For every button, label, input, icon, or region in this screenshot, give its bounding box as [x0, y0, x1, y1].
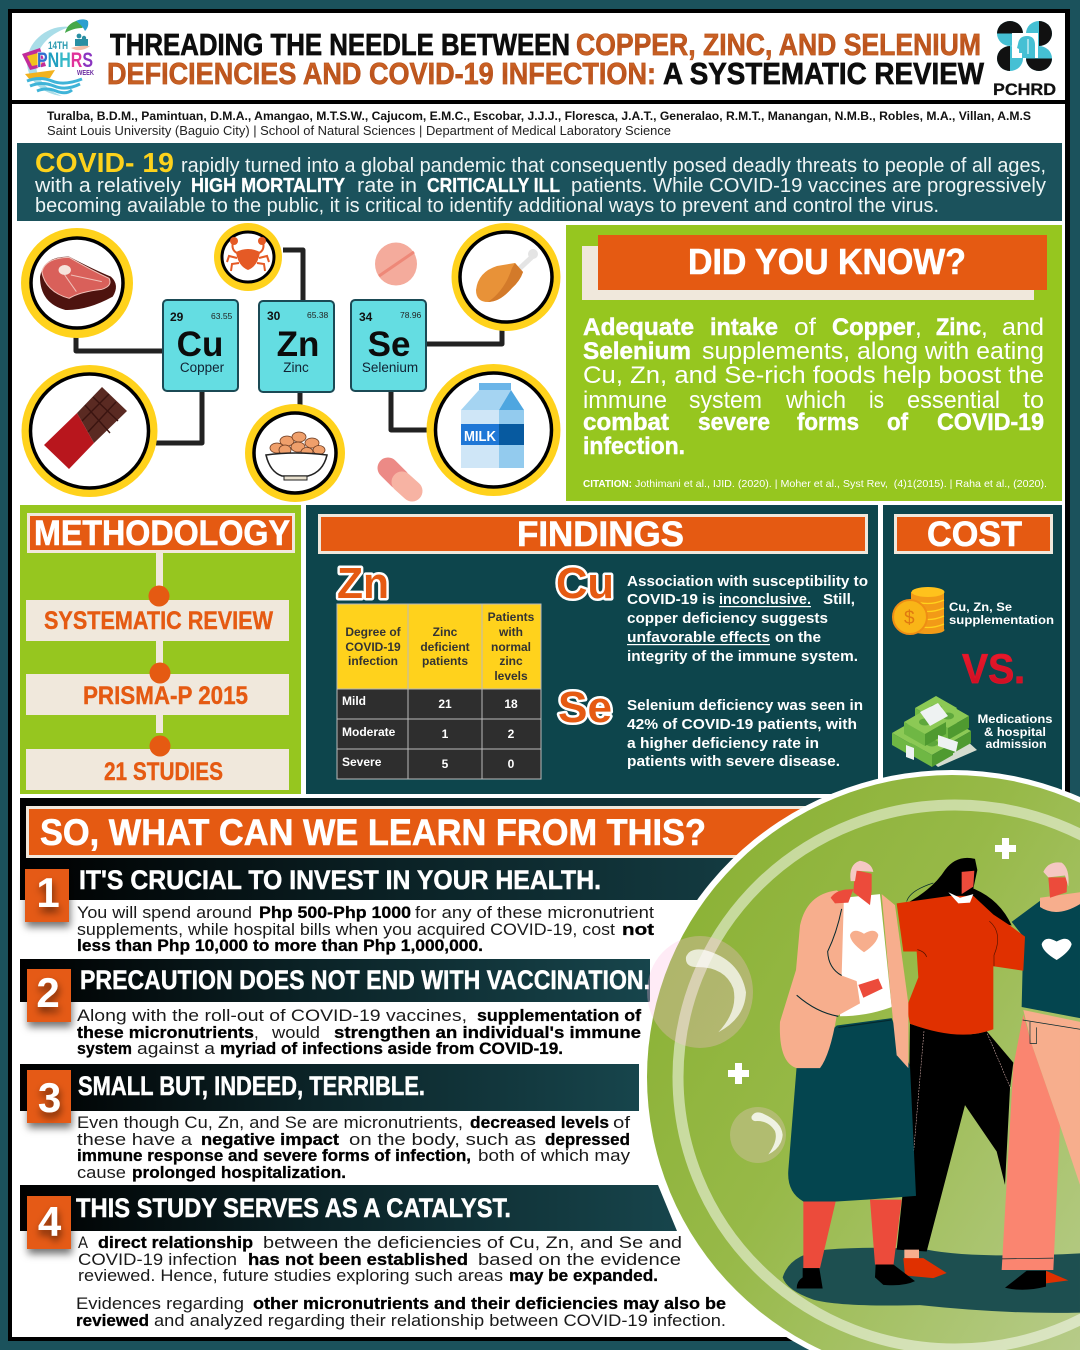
- step: 21 studies: 21 STUDIES: [104, 758, 223, 786]
- header rule: [12, 100, 1065, 104]
- card: copper: [163, 300, 238, 391]
- lesson 4: based on the evidence: [478, 1250, 681, 1269]
- card: copper: 29: [170, 310, 184, 324]
- lesson 1: You will spend around: [77, 903, 252, 922]
- card: selenium: Selenium: [362, 360, 418, 375]
- did you know body text: severe: [698, 409, 770, 436]
- lesson 4: has not been established: [248, 1250, 468, 1269]
- did you know body text: Zinc: [936, 314, 981, 341]
- logo: 14th PNHRS week: WEEK: [77, 68, 94, 77]
- heading: findings: [318, 514, 868, 554]
- selenium finding text: 42% of COVID-19 patients, with: [627, 716, 857, 733]
- step: systematic review: SYSTEMATIC REVIEW: [44, 607, 273, 635]
- citation: CITATION:: [583, 478, 632, 490]
- lesson 3: on the body, such as: [349, 1130, 536, 1149]
- lesson 3: negative impact: [201, 1130, 339, 1149]
- person: man in teal shirt: [1002, 862, 1080, 1290]
- authors and affiliation: Saint Louis University (Baguio City) | School of Natural Sciences | Department of Medical Laboratory Science: [47, 124, 671, 138]
- label: medications: Medications: [978, 712, 1053, 726]
- copper finding text: copper deficiency suggests: [627, 610, 828, 627]
- card: copper: Copper: [180, 360, 225, 375]
- lesson 3: both of which may: [478, 1146, 631, 1165]
- lesson 2: strengthen an individual's immune: [334, 1023, 641, 1042]
- lesson 2: myriad of infections aside from COVID-19.: [220, 1039, 563, 1058]
- card: selenium: [351, 300, 426, 391]
- closing paragraph: Evidences regarding: [76, 1294, 244, 1313]
- lesson 1: not: [622, 920, 654, 939]
- table: zinc levels: normal: [491, 640, 531, 654]
- authors and affiliation: Turalba, B.D.M., Pamintuan, D.M.A., Amangao, M.T.S.W., Cajucom, E.M.C., Escobar, J.J.J., Floresca, J.A.T., Generalao, R.M.T., Manangan, N.M.B., Robles, M.A., Villan, A.M.S: [47, 109, 1031, 123]
- heading: methodology: METHODOLOGY: [34, 514, 290, 553]
- lesson 4: A: [78, 1233, 89, 1252]
- card: copper: 63.55: [211, 311, 233, 321]
- panel: element cards and food sources: [21, 223, 560, 502]
- panel: COVID-19 intro: COVID- 19: [35, 147, 174, 178]
- lesson 4: between the deficiencies of Cu, Zn, and Se and: [263, 1233, 682, 1252]
- step: PRISMA-P 2015: [26, 674, 289, 715]
- lesson 4: 4: [38, 1198, 62, 1245]
- copper finding text: COVID-19 is: [627, 591, 715, 608]
- table: zinc levels: [337, 604, 541, 779]
- lesson 3: of: [613, 1113, 630, 1132]
- heading: did you know: [582, 235, 1047, 300]
- card: copper: Cu: [177, 325, 223, 364]
- copper finding text: unfavorable effects: [627, 629, 770, 646]
- label: medications: [978, 712, 1053, 751]
- people: [780, 858, 1080, 1313]
- bubble disc: [647, 775, 1080, 1350]
- panel: findings: [306, 505, 878, 794]
- did you know body text: ,: [981, 314, 988, 341]
- table: zinc levels: Moderate: [342, 725, 396, 739]
- illustration: friends inside bubble: [640, 770, 1080, 1350]
- closing paragraph: reviewed: [76, 1311, 149, 1330]
- panel: COVID-19 intro: rate in: [357, 175, 417, 197]
- copper finding text: inconclusive.: [719, 591, 811, 608]
- title: DEFICIENCIES AND COVID-19 INFECTION:: [107, 56, 656, 91]
- lesson 3: immune response and severe forms of infection,: [77, 1146, 471, 1165]
- table: zinc levels: Severe: [342, 755, 382, 769]
- panel: COVID-19 intro: rapidly turned into a global pandemic that consequently posed deadly threats to people of all ages,: [181, 155, 1046, 177]
- did you know body text: system: [689, 387, 762, 414]
- panel: COVID-19 intro: [17, 143, 1062, 221]
- lesson 3: prolonged hospitalization.: [132, 1163, 346, 1182]
- step markers: [148, 586, 170, 756]
- bubble white edge: [640, 770, 1080, 1350]
- card: selenium: 78.96: [400, 310, 422, 320]
- versus: VS.: [962, 645, 1025, 692]
- lesson 2: system: [77, 1039, 132, 1058]
- lesson 3: 3: [38, 1074, 61, 1121]
- panel: methodology: [20, 505, 301, 794]
- copper finding text: Association with susceptibility to: [627, 573, 868, 590]
- label: supplementation: [949, 600, 1054, 627]
- icon: nuts: [245, 404, 345, 502]
- did you know body text: Copper: [832, 314, 915, 341]
- icon: milk: MILK: [464, 428, 496, 445]
- person: man in jacket: [780, 861, 916, 1289]
- icon: money pile: [892, 696, 977, 767]
- table: zinc levels: Patients: [488, 610, 535, 624]
- did you know body text: of: [794, 314, 816, 341]
- lesson 1: IT'S CRUCIAL TO INVEST IN YOUR HEALTH.: [79, 865, 601, 895]
- selenium finding text: patients with severe disease.: [627, 753, 840, 770]
- lesson 4: may be expanded.: [509, 1266, 658, 1285]
- ground shadow: [783, 1248, 1080, 1313]
- did you know body text: forms: [797, 409, 859, 436]
- lesson 2: Along with the roll-out of COVID-19 vaccines,: [77, 1006, 467, 1025]
- icon: coins: $: [904, 608, 915, 629]
- card: selenium: Se: [368, 325, 410, 364]
- lesson 4: [20, 1185, 682, 1285]
- did you know body text: is: [869, 387, 884, 414]
- lesson 1: supplements, while hospital bills when you acquired COVID-19, cost: [77, 920, 615, 939]
- did you know body text: Adequate: [583, 314, 694, 341]
- person: woman upper body: [897, 871, 1025, 1035]
- closing paragraph: and analyzed regarding their relationship between COVID-19 infection.: [154, 1311, 726, 1330]
- logo: PCHRD: [993, 21, 1056, 99]
- lesson 3: depressed: [545, 1130, 630, 1149]
- table: zinc levels: 18: [504, 697, 518, 711]
- card: selenium: 34: [359, 310, 373, 324]
- methodology connector: [156, 553, 163, 733]
- icon: coins: [893, 587, 944, 634]
- step: 21 studies: [26, 749, 289, 790]
- did you know body text: ,: [915, 314, 922, 341]
- table: zinc levels: with: [498, 625, 523, 639]
- lesson 2: supplementation of: [477, 1006, 641, 1025]
- title: THREADING THE NEEDLE BETWEEN: [110, 27, 570, 62]
- copper symbol: Cu: [556, 559, 614, 608]
- copper finding text: integrity of the immune system.: [627, 648, 858, 665]
- icon: capsule: [388, 468, 412, 491]
- selenium finding text: a higher deficiency rate in: [627, 735, 819, 752]
- did you know body text: immune: [583, 387, 667, 414]
- zinc symbol: Zn: [337, 559, 389, 608]
- table: zinc levels: levels: [494, 669, 528, 683]
- table: zinc levels: COVID-19: [345, 640, 401, 654]
- lesson 1: [25, 865, 654, 955]
- did you know body text: infection.: [583, 433, 685, 460]
- table: zinc levels: 21: [438, 697, 452, 711]
- table: zinc levels: Zinc: [433, 625, 458, 639]
- lesson 1: 1: [36, 869, 60, 916]
- title: [107, 27, 985, 91]
- heading: cost: [894, 514, 1053, 554]
- card: zinc: Zinc: [283, 360, 309, 375]
- citation: Jothimani et al., IJID. (2020). | Moher et al., Syst Rev, (4)1(2015). | Raha et al., (2020).: [635, 478, 1047, 490]
- label: supplementation: Cu, Zn, Se: [949, 600, 1012, 614]
- table: zinc levels: infection: [348, 654, 398, 668]
- did you know body text: intake: [710, 314, 778, 341]
- lesson 3: these have a: [77, 1130, 193, 1149]
- did you know body text: Cu, Zn, and Se-rich foods help boost the: [583, 362, 1044, 389]
- person: woman lower body and hair: [897, 858, 1013, 1278]
- table: zinc levels: 5: [442, 757, 449, 771]
- table: zinc levels: 0: [508, 757, 515, 771]
- lesson 4: THIS STUDY SERVES AS A CATALYST.: [76, 1193, 511, 1223]
- lesson 1: Php 500-Php 1000: [259, 903, 411, 922]
- panel: did you know: [566, 225, 1062, 501]
- heading: what can we learn: SO, WHAT CAN WE LEARN FROM THIS?: [40, 812, 706, 853]
- copper finding text: on the: [775, 629, 821, 646]
- did you know body text: and: [1002, 314, 1044, 341]
- label: supplementation: supplementation: [949, 613, 1054, 627]
- logo: PCHRD: PCHRD: [993, 81, 1056, 99]
- did you know body text: supplements, along with eating: [702, 338, 1044, 365]
- card: zinc: Zn: [277, 325, 319, 364]
- icon: chocolate: [22, 365, 158, 497]
- lesson 2: these micronutrients: [77, 1023, 254, 1042]
- selenium finding text: Selenium deficiency was seen in: [627, 697, 863, 714]
- lesson 4: reviewed. Hence, future studies exploring such areas: [78, 1266, 503, 1285]
- panel: COVID-19 intro: CRITICALLY ILL: [427, 175, 560, 197]
- closing paragraph: [76, 1294, 726, 1330]
- copper finding text: [627, 573, 868, 665]
- card: zinc: [259, 301, 334, 392]
- panel: cost: [883, 505, 1062, 794]
- logo: 14th PNHRS week: PNHRS: [37, 49, 93, 72]
- bubble highlight ring: [678, 805, 1080, 1349]
- lesson 2: would: [271, 1023, 320, 1042]
- panel: COVID-19 intro: with a relatively: [34, 175, 181, 197]
- did you know body text: which: [785, 387, 846, 414]
- copper finding text: Still,: [823, 591, 855, 608]
- heading: did you know: DID YOU KNOW?: [688, 241, 966, 282]
- lesson 2: [20, 959, 650, 1058]
- logo: 14th PNHRS week: 14TH: [48, 40, 68, 52]
- icon: meat: [21, 228, 133, 338]
- title: A SYSTEMATIC REVIEW: [663, 56, 985, 91]
- lesson 2: 2: [36, 969, 60, 1016]
- icon: crab: [214, 223, 282, 291]
- table: zinc levels: zinc: [499, 654, 523, 668]
- heading: cost: COST: [927, 515, 1022, 554]
- did you know body text: essential: [907, 387, 1000, 414]
- lesson 2: against a: [137, 1039, 216, 1058]
- selenium symbol: Se: [558, 683, 612, 732]
- did you know body text: to: [1023, 387, 1044, 414]
- header band: [12, 19, 1065, 104]
- lesson 4: direct relationship: [98, 1233, 253, 1252]
- icon: tablet: [375, 242, 417, 286]
- table: zinc levels: 1: [442, 727, 449, 741]
- connectors: [76, 250, 502, 443]
- table: zinc levels: Mild: [342, 694, 366, 708]
- did you know body text: COVID-19: [937, 409, 1044, 436]
- lesson 2: ,: [254, 1023, 259, 1042]
- step: systematic review: [26, 600, 289, 641]
- heading: findings: FINDINGS: [517, 515, 684, 554]
- plus marks: [728, 838, 1016, 1084]
- lesson 4: COVID-19 infection: [78, 1250, 237, 1269]
- selenium finding text: [627, 697, 863, 770]
- did you know body text: combat: [583, 409, 669, 436]
- closing paragraph: other micronutrients and their deficiencies may also be: [253, 1294, 726, 1313]
- panel: COVID-19 intro: HIGH MORTALITY: [191, 175, 346, 197]
- lesson 3: cause: [77, 1163, 126, 1182]
- table: zinc levels: patients: [422, 654, 468, 668]
- lesson 3: SMALL BUT, INDEED, TERRIBLE.: [78, 1071, 425, 1101]
- title: COPPER, ZINC, AND SELENIUM: [576, 27, 981, 62]
- step: PRISMA-P 2015: PRISMA-P 2015: [83, 682, 248, 710]
- panel: COVID-19 intro: patients. While COVID-19 vaccines are progressively: [571, 175, 1046, 197]
- icon: milk: [426, 364, 560, 496]
- logo: 14th PNHRS week: [22, 19, 94, 96]
- lesson 3: Even though Cu, Zn, and Se are micronutrients,: [77, 1113, 463, 1132]
- panel: what can we learn: [20, 798, 870, 1330]
- label: medications: & hospital: [984, 725, 1046, 739]
- card: zinc: 65.38: [307, 310, 329, 320]
- icon: chicken: [452, 223, 560, 331]
- top dark band: [20, 798, 870, 900]
- label: medications: admission: [986, 737, 1046, 751]
- did you know body text: Selenium: [583, 338, 691, 365]
- bubble: small: [730, 1107, 786, 1163]
- lesson 3: decreased levels: [470, 1113, 609, 1132]
- lesson 1: for any of these micronutrient: [415, 903, 654, 922]
- did you know body text: of: [887, 409, 909, 436]
- lesson 1: less than Php 10,000 to more than Php 1,000,000.: [77, 936, 483, 955]
- lesson 3: [20, 1064, 639, 1182]
- table: zinc levels: Degree of: [345, 625, 402, 639]
- lesson 2: PRECAUTION DOES NOT END WITH VACCINATION.: [80, 965, 650, 995]
- panel: COVID-19 intro: becoming available to the public, it is critical to identify additional ways to prevent and control the virus.: [35, 195, 939, 217]
- table: zinc levels: 2: [508, 727, 515, 741]
- did you know body text: [583, 314, 1044, 460]
- bubble: large: [647, 936, 753, 1048]
- table: zinc levels: deficient: [420, 640, 470, 654]
- authors and affiliation: [47, 109, 1031, 138]
- card: zinc: 30: [267, 309, 281, 323]
